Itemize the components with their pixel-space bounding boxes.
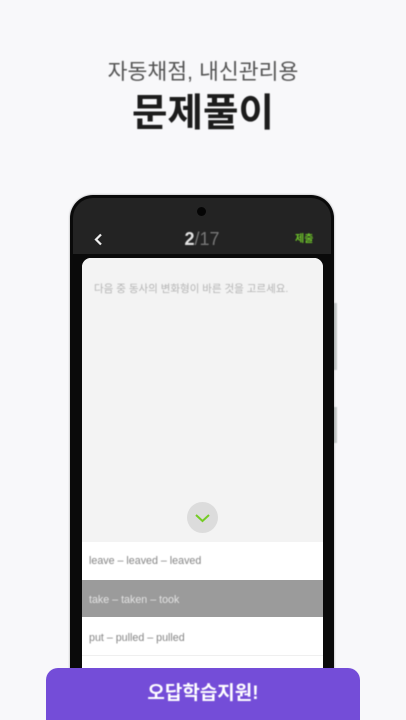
question panel: [82, 258, 323, 542]
phone header bar: [73, 198, 331, 254]
icon: back arrow: [94, 234, 102, 246]
question text: 다음 중 동사의 변화형이 바른 것을 고르세요.: [94, 283, 288, 295]
phone side button: upper: [333, 303, 337, 370]
phone side button: lower: [333, 407, 337, 443]
phone mockup: [70, 195, 334, 720]
icon: scroll down button: [187, 502, 218, 533]
answer option 1: leave – leaved – leaved: [89, 555, 201, 567]
answer option 3: put – pulled – pulled: [89, 632, 185, 644]
answer option 1: [82, 542, 323, 580]
title: 문제풀이: [132, 92, 274, 135]
subtitle: 자동채점, 내신관리용: [108, 59, 298, 84]
question counter: 2/17: [184, 229, 220, 249]
banner text: 오답학습지원!: [147, 683, 259, 704]
submit label: 제출: [295, 234, 313, 245]
camera hole: [197, 207, 206, 216]
answer option 3: [82, 617, 323, 656]
call to action banner: [46, 668, 360, 720]
answer option 2 selected: [82, 580, 323, 617]
phone screen: [82, 258, 323, 720]
answer option 2 selected: take – taken – took: [89, 594, 179, 606]
